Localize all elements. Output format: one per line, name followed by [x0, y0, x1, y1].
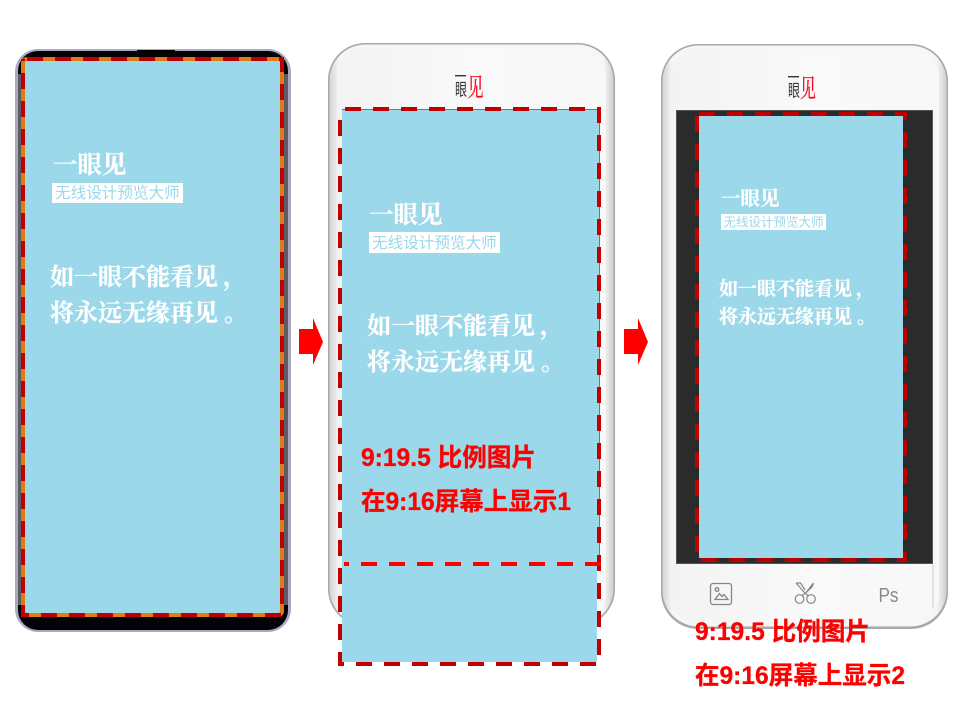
slogan: 如一眼不能看见，	[50, 257, 247, 292]
caption: 在9:16屏幕上显示2	[695, 662, 905, 690]
screen image	[699, 116, 903, 558]
panel: phone with overflowing image	[328, 43, 615, 664]
slogan	[367, 306, 565, 377]
panel: full-screen phone	[15, 49, 291, 632]
app name: 一眼见	[369, 196, 442, 231]
dark viewport	[676, 110, 932, 564]
dashed outline	[340, 109, 599, 664]
icon: scissors	[795, 583, 815, 603]
logo: 眼	[788, 83, 800, 101]
app name: 一眼见	[721, 183, 780, 211]
phone body	[15, 49, 291, 632]
logo: 见	[468, 67, 484, 103]
dashed outline	[23, 59, 282, 615]
slogan: 将永远无缘再见。	[50, 293, 248, 328]
slogan: 如一眼不能看见，	[367, 306, 564, 341]
phone body	[328, 43, 615, 626]
thin right edge	[932, 565, 934, 608]
caption: 9:19.5 比例图片	[361, 444, 536, 472]
caption: 9:19.5 比例图片	[695, 618, 870, 646]
icon: picture	[710, 584, 732, 604]
16:9 cut line	[344, 562, 602, 566]
phone body	[661, 44, 948, 629]
caption	[695, 618, 905, 690]
slogan: 将永远无缘再见 。	[719, 302, 876, 329]
logo	[455, 67, 484, 103]
slogan: 将永远无缘再见。	[367, 342, 565, 377]
subtitle tag: 无线设计预览大师	[372, 234, 497, 252]
dashed outline	[697, 114, 905, 560]
app name: 一眼见	[53, 146, 126, 181]
caption	[361, 444, 571, 516]
subtitle tag: 无线设计预览大师	[724, 214, 824, 230]
slogan	[719, 274, 876, 329]
slogan	[50, 257, 248, 328]
arrow 2	[624, 318, 648, 365]
subtitle tag: 无线设计预览大师	[55, 184, 180, 202]
slogan: 如一眼不能看见，	[719, 274, 875, 301]
icon: Ps: Ps	[878, 584, 898, 607]
logo: 眼	[455, 82, 467, 100]
panel: phone with letterboxed image	[661, 44, 948, 690]
arrow 1	[299, 318, 323, 365]
logo	[788, 68, 816, 104]
screen image	[21, 57, 284, 617]
logo: 见	[800, 68, 816, 104]
caption: 在9:16屏幕上显示1	[361, 488, 571, 516]
screen image	[342, 109, 600, 662]
